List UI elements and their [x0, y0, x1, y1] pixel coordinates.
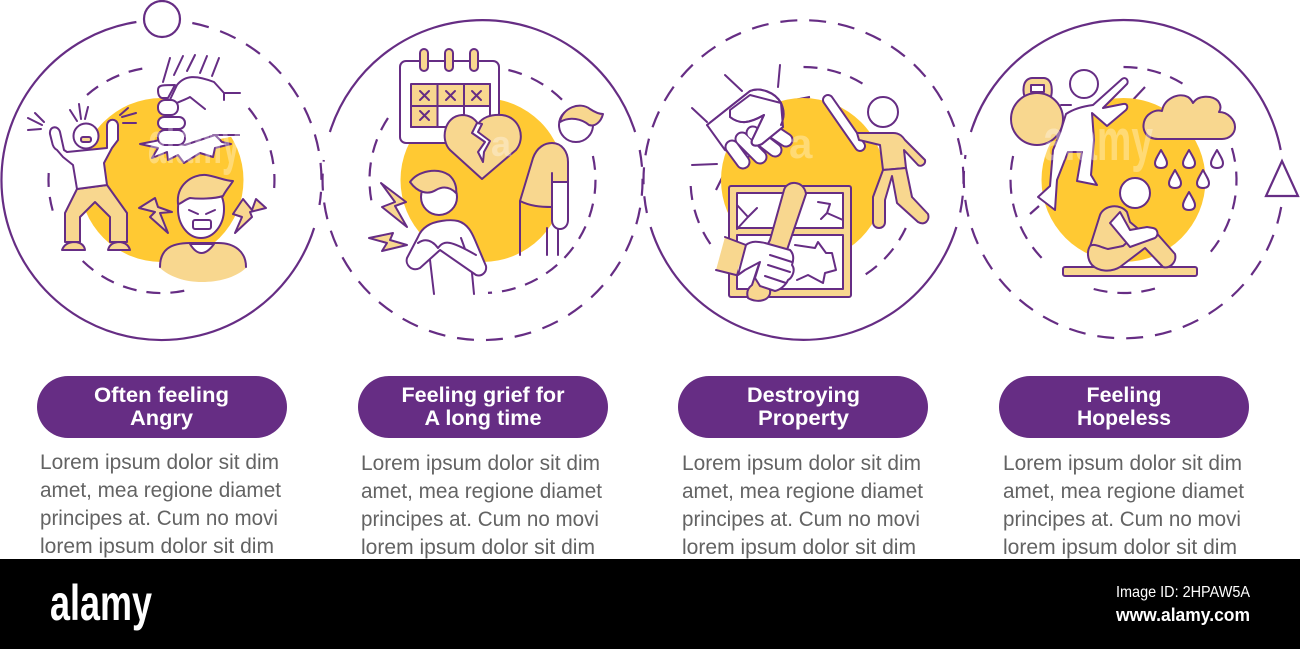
body text: principes at. Cum no movi: [40, 506, 278, 530]
title pill: Often feeling: [94, 383, 229, 407]
icon: broken window with hand and bat: [716, 183, 851, 301]
body text: amet, mea regione diamet: [361, 479, 602, 503]
icon: broken heart: [445, 115, 521, 179]
watermark fragment: alamy: [1043, 108, 1153, 173]
yellow circle: [721, 98, 885, 262]
panel: often feeling angry: [1, 1, 321, 558]
body text: principes at. Cum no movi: [682, 507, 920, 531]
watermark fragment: a: [789, 120, 813, 167]
title pill: [358, 376, 608, 438]
body text: principes at. Cum no movi: [361, 507, 599, 531]
title pill: [37, 376, 287, 438]
title pill: Hopeless: [1077, 406, 1171, 430]
watermark fragment: alamy: [148, 111, 240, 176]
yellow circle: [400, 98, 564, 262]
icon: clenched fist: [692, 65, 786, 165]
outer ring: [323, 20, 643, 340]
body text: amet, mea regione diamet: [682, 479, 923, 503]
title pill: Property: [758, 406, 849, 430]
icon: angry man: [139, 175, 266, 282]
body text: lorem ipsum dolor sit dim: [682, 535, 916, 559]
footer bar: [0, 559, 1300, 649]
image id: Image ID: 2HPAW5A: [1116, 584, 1250, 601]
inner dashed ring: [691, 67, 906, 276]
body text: lorem ipsum dolor sit dim: [40, 534, 274, 558]
body text: Lorem ipsum dolor sit dim: [682, 451, 921, 475]
body text: Lorem ipsum dolor sit dim: [40, 450, 279, 474]
outer ring: [644, 20, 964, 340]
body text: [1003, 451, 1244, 559]
body text: lorem ipsum dolor sit dim: [361, 535, 595, 559]
yellow circle: [1042, 98, 1206, 262]
body text: [682, 451, 923, 559]
body text: Lorem ipsum dolor sit dim: [1003, 451, 1242, 475]
inner dashed ring: [1011, 67, 1237, 293]
body text: [40, 450, 281, 558]
title pill: A long time: [424, 406, 542, 430]
panel: feeling hopeless: [964, 20, 1298, 559]
icon: fist punching: [140, 55, 240, 163]
title pill: Feeling grief for: [402, 383, 565, 407]
watermark fragment: a: [491, 123, 512, 164]
body text: amet, mea regione diamet: [1003, 479, 1244, 503]
outer ring with start circle: [1, 1, 321, 340]
icon: standing man: [520, 106, 603, 255]
icon: boy with crossed arms: [369, 171, 486, 294]
icon: scared person: [28, 104, 136, 250]
body text: Lorem ipsum dolor sit dim: [361, 451, 600, 475]
title pill: Angry: [130, 406, 193, 430]
body text: [361, 451, 602, 559]
yellow circle: [80, 98, 244, 262]
icon: person carrying kettlebell: [1011, 70, 1128, 210]
icon: sad seated person: [1063, 178, 1197, 276]
title pill: [999, 376, 1249, 438]
panel: destroying property: [644, 20, 964, 559]
body text: amet, mea regione diamet: [40, 478, 281, 502]
outer ring with end triangle: [964, 20, 1298, 338]
website: www.alamy.com: [1115, 605, 1250, 625]
title pill: Destroying: [747, 383, 860, 407]
inner dashed ring: [48, 68, 274, 293]
body text: lorem ipsum dolor sit dim: [1003, 535, 1237, 559]
title pill: [678, 376, 928, 438]
body text: principes at. Cum no movi: [1003, 507, 1241, 531]
panel: feeling grief for a long time: [323, 20, 643, 559]
icon: person with bat: [828, 97, 928, 228]
inner dashed ring: [369, 70, 595, 293]
title pill: Feeling: [1086, 383, 1162, 407]
alamy logo: alamy: [50, 575, 152, 631]
icon: calendar: [400, 49, 499, 143]
icon: rain cloud: [1144, 95, 1235, 210]
